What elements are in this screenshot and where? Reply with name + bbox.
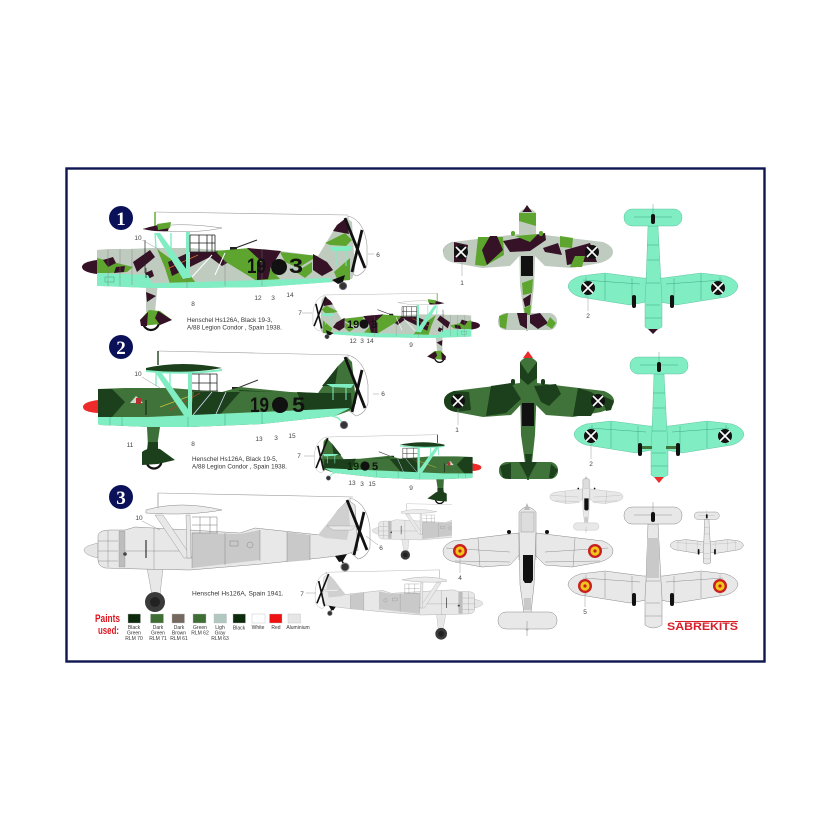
aircraft 1 top view <box>443 205 613 331</box>
swatches <box>128 614 300 623</box>
aircraft 2 top view <box>444 351 614 480</box>
aircraft 2 side view small <box>314 435 481 504</box>
reference numbers: 10 <box>134 235 142 242</box>
badge 3 <box>109 485 133 509</box>
reference numbers: 7 <box>300 591 304 598</box>
aircraft 1 underside view <box>568 204 738 334</box>
aircraft 3 side view small <box>315 570 483 640</box>
swatch names: Dark <box>153 625 164 631</box>
reference numbers: 12 <box>254 295 262 302</box>
roundel right <box>588 544 602 558</box>
swatch names: Ligh <box>215 625 225 631</box>
aircraft 1 side view small: 19 <box>347 319 359 331</box>
roundel left <box>578 579 592 593</box>
aircraft 2 side view small: 5 <box>372 461 378 473</box>
reference numbers: 14 <box>366 338 374 345</box>
frame <box>66 168 764 662</box>
reference numbers: 12 <box>349 338 357 345</box>
reference numbers: 9 <box>409 342 413 349</box>
aircraft 1 side view small: 3 <box>371 319 377 331</box>
paints legend <box>95 613 310 642</box>
swatch names: Brown <box>172 630 186 636</box>
reference numbers: 6 <box>379 545 383 552</box>
reference numbers: 6 <box>381 391 385 398</box>
badge 1: 1 <box>116 209 126 230</box>
aircraft 3 side view partial <box>372 504 452 560</box>
reference numbers: 14 <box>286 292 294 299</box>
swatch names: Red <box>271 625 281 631</box>
swatch names: Green <box>127 630 141 636</box>
reference numbers: 4 <box>458 575 462 582</box>
swatch names: RLM 71 <box>149 636 167 642</box>
reference numbers: 11 <box>127 442 134 449</box>
reference numbers: 1 <box>455 427 459 434</box>
swatch names: RLM 70 <box>125 636 143 642</box>
code 19-3: 19 <box>247 255 266 278</box>
reference numbers: 3 <box>271 295 275 302</box>
swatch names: Black <box>128 625 141 631</box>
leader lines <box>142 240 591 607</box>
badge 1 <box>109 206 133 230</box>
reference numbers: 13 <box>348 480 356 487</box>
swatch names: White <box>252 625 265 631</box>
caption aircraft 2: A/88 Legion Condor , Spain 1938. <box>192 464 287 470</box>
swatch names <box>125 625 310 642</box>
aircraft 3 underside view <box>568 502 738 628</box>
reference numbers: 7 <box>297 453 301 460</box>
caption aircraft 2 <box>192 456 287 470</box>
aircraft 3 side view large <box>84 493 370 612</box>
caption aircraft 1: A/88 Legion Condor , Spain 1938. <box>187 324 282 332</box>
reference numbers: 8 <box>191 441 195 448</box>
reference numbers: 1 <box>460 280 464 287</box>
swatch names: Aluminium <box>286 625 310 631</box>
aircraft 1 side view large: 3 <box>289 255 303 278</box>
reference numbers <box>127 235 593 616</box>
reference numbers: 6 <box>376 252 380 259</box>
reference numbers: 7 <box>298 310 302 317</box>
reference numbers: 10 <box>135 515 143 522</box>
logo Sabrekits: SABREKITS <box>667 621 738 633</box>
roundel right <box>713 579 727 593</box>
aircraft 2 side view large: 5 <box>292 394 305 417</box>
paints heading: used: <box>98 625 119 637</box>
reference numbers: 3 <box>274 435 278 442</box>
aircraft 3 underside view small <box>670 510 743 564</box>
swatch names: Black <box>233 626 246 632</box>
aircraft 2 side view small: 19 <box>347 461 359 473</box>
reference numbers: 5 <box>583 609 587 616</box>
code 19-5: 19 <box>250 394 269 417</box>
badge 2 <box>109 335 133 359</box>
swatch names: Gray <box>215 630 226 636</box>
caption aircraft 1: Henschel Hs126A, Black 19-3, <box>187 317 273 324</box>
reference numbers: 13 <box>255 436 263 443</box>
aircraft 3 top view <box>443 503 613 636</box>
aircraft 2 side view large <box>83 351 368 468</box>
swatch names: RLM 61 <box>170 636 188 642</box>
aircraft 1 side view large <box>82 212 367 330</box>
reference numbers: 2 <box>586 313 590 320</box>
caption aircraft 3: Henschel Hs126A, Spain 1941. <box>192 590 284 598</box>
badge 2: 2 <box>116 338 126 359</box>
caption aircraft 1 <box>187 317 282 332</box>
roundel left <box>453 544 467 558</box>
aircraft 3 top view small <box>550 476 623 533</box>
reference numbers: 3 <box>360 481 364 488</box>
caption aircraft 2: Henschel Hs126A, Black 19-5, <box>192 456 278 463</box>
swatch names: RLM 63 <box>211 636 229 642</box>
swatch names: RLM 62 <box>191 630 209 636</box>
reference numbers: 15 <box>368 481 376 488</box>
reference numbers: 3 <box>360 338 364 345</box>
reference numbers: 10 <box>134 371 142 378</box>
reference numbers: 2 <box>589 461 593 468</box>
reference numbers: 9 <box>409 485 413 492</box>
swatch names: Green <box>193 625 207 631</box>
aircraft 2 underside view <box>574 352 744 483</box>
paints heading <box>95 613 120 637</box>
swatch names: Green <box>151 630 165 636</box>
badge 3: 3 <box>116 488 126 509</box>
reference numbers: 15 <box>288 433 296 440</box>
paints heading: Paints <box>95 613 120 625</box>
reference numbers: 8 <box>191 301 195 308</box>
aircraft 1 side view small <box>313 293 480 362</box>
swatch names: Dark <box>174 625 185 631</box>
